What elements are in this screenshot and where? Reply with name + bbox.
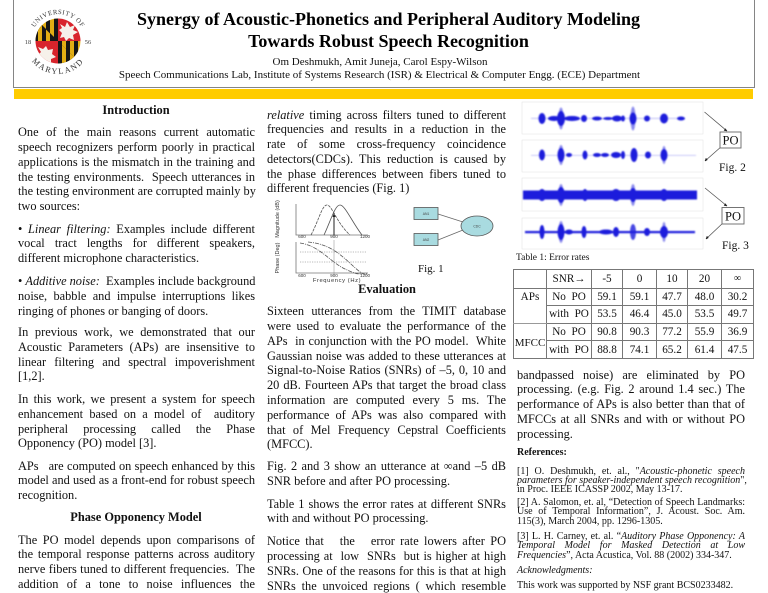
icon: University of Maryland seal <box>25 10 92 74</box>
text: results discussion: Notice that the error rate lowers after PO <box>267 534 506 548</box>
text: reference 3 <box>517 531 745 561</box>
affiliation: Speech Communications Lab, Institute of Systems Research (ISR) & Electrical & Computer Engg. (ECE) Department <box>119 69 640 81</box>
text: figure description <box>267 459 506 488</box>
table: error rates: 0 <box>637 273 642 285</box>
text: relative timing continuation: relative timing across filters tuned to different <box>267 108 506 122</box>
text: APs front-end: recognition. <box>18 488 77 502</box>
text: phase opponency model <box>18 533 255 591</box>
icon: University of Maryland seal: UNIVERSITY OF <box>31 10 84 26</box>
caption: Fig. 1: Fig. 1 <box>418 262 444 274</box>
icon: University of Maryland seal: MARYLAND <box>32 58 82 74</box>
text: evaluation paragraph: (MFCC). <box>267 437 313 451</box>
callout: PO arrows and labels: PO <box>723 134 738 148</box>
table: error rates: 53.5 <box>695 308 714 320</box>
text: this work: Opponency (PO) model [3]. <box>18 436 156 450</box>
text: previous work: In previous work, we demonstrated that our <box>18 325 255 339</box>
chart: waveforms Fig. 2 and Fig. 3 <box>522 102 704 250</box>
text: results discussion <box>267 534 506 593</box>
text: introduction paragraph: One of the main reasons current automatic <box>18 125 255 139</box>
text: results continuation: MFCCs at all SNRs and with or without PO <box>517 412 745 426</box>
chart: filter magnitude and phase response: 1200 <box>360 273 371 278</box>
yellow divider bar <box>14 89 753 99</box>
text: introduction paragraph: two sources: <box>18 199 80 213</box>
text: results discussion: processing at low SNRs but is higher at high <box>267 549 506 563</box>
text: evaluation paragraph: Sixteen utterances from the TIMIT database <box>267 304 506 318</box>
quarter: Crossland bottom left <box>35 41 58 64</box>
text: previous work: [1,2]. <box>18 369 45 383</box>
chart: filter magnitude and phase response: 600 <box>298 273 306 278</box>
text: reference 3: Frequencies”, Acta Acustica, Vol. 88 (2002) 334-347. <box>517 550 732 561</box>
text: reference 2 <box>517 497 745 527</box>
text: evaluation paragraph: information are computed every 5 ms. The <box>267 393 506 407</box>
text: figure description: SNR before and after PO processing. <box>267 474 450 488</box>
text: linear filtering <box>18 222 255 265</box>
text: results discussion: SNRs the unvoiced regions ( which resemble <box>267 579 506 593</box>
chart: filter magnitude and phase response: Phase (Deg) <box>275 242 281 273</box>
quarter: Calvert top left <box>35 18 58 41</box>
caption: Table 1: Table 1: Error rates <box>516 253 589 263</box>
text: evaluation paragraph: performance of APs was also compared with <box>267 408 506 422</box>
text: additive noise <box>18 274 256 318</box>
callout: PO arrows and labels: PO <box>725 210 741 224</box>
text: evaluation paragraph: were used to evaluate the performance of the <box>267 319 506 333</box>
table: error rates: 10 <box>666 273 678 285</box>
table: error rates: 74.1 <box>630 344 649 356</box>
text: evaluation paragraph: Signal-to-Noise Ratios (SNRs) of –5, 0, 10 and <box>267 363 506 377</box>
text: reference 2: Use of Temporal Information”, J. Acoust. Soc. Am. <box>517 506 745 517</box>
text: relative timing continuation <box>267 108 506 195</box>
table: error rates: MFCC <box>515 337 545 349</box>
wave 1: clean before PO <box>531 106 685 130</box>
table: error rates: 47.5 <box>728 344 747 356</box>
text: phase opponency model: nerve fibers tuned to different frequencies. The <box>18 562 255 576</box>
table: error rates: 48.0 <box>695 290 714 302</box>
text: previous work <box>18 325 255 383</box>
text: linear filtering: • Linear filtering: Examples include different <box>18 222 255 236</box>
text: APs front-end: APs are computed on speech enhanced by this <box>18 459 255 473</box>
heading: Phase Opponency Model: Phase Opponency Model <box>70 510 202 524</box>
chart: filter magnitude and phase response: Frequency (Hz) <box>313 278 361 284</box>
text: results continuation: bandpassed noise) are eliminated by PO <box>517 368 745 382</box>
diagram: AN fibers to coincidence detector <box>414 207 494 246</box>
text: linear filtering: vocal tract lengths for different speakers, <box>18 236 255 250</box>
table: error rates: 90.3 <box>630 326 649 338</box>
heading: Introduction: Introduction <box>102 102 170 116</box>
caption: Fig. 2: Fig. 2 <box>719 162 746 174</box>
icon: University of Maryland seal: 18 <box>25 39 31 46</box>
text: APs front-end: model and used as a front-end for robust speech <box>18 473 255 487</box>
text: table description: with and without PO processing. <box>267 511 428 525</box>
text: introduction paragraph <box>18 125 256 213</box>
table: error rates: 61.4 <box>695 344 714 356</box>
caption: Fig. 3: Fig. 3 <box>722 240 749 252</box>
quarter: Crossland top right <box>58 18 81 41</box>
text: table description <box>267 497 506 525</box>
wave 4: noisy after PO <box>525 221 695 243</box>
text: evaluation paragraph: APs in conjunction with the PO model. White <box>267 334 506 348</box>
text: this work: In this work, we present a system for speech <box>18 392 255 406</box>
title: Synergy of Acoustic-Phonetics and Peripheral Auditory Modeling <box>137 9 640 29</box>
table: error rates <box>513 269 754 359</box>
text: reference 1 <box>516 466 747 495</box>
text: reference 2: [2] A. Salomon, et. al, “Detection of Speech Landmarks: <box>517 497 745 508</box>
table: error rates: -5 <box>602 273 612 285</box>
table: error rates: 90.8 <box>597 326 617 338</box>
diagram: AN fibers to coincidence detector: CDC <box>473 224 481 228</box>
text: evaluation paragraph: Gaussian noise was added to these utterances at <box>267 349 506 363</box>
chart: filter magnitude and phase response: 900 <box>330 273 338 278</box>
text: relative timing continuation: frequencies and results in a reduction in the <box>267 122 506 136</box>
text: reference 1: in Proc. IEEE ICASSP 2002, May 13-17. <box>517 484 682 495</box>
table: error rates: 65.2 <box>662 344 682 356</box>
text: figure description: Fig. 2 and 3 show an utterance at ∞and –5 dB <box>267 459 506 473</box>
heading: Acknowledgments: Acknowledgments: <box>517 564 593 576</box>
text: reference 2: 115(3), March 2004, pp. 1296-1305. <box>517 516 663 527</box>
heading: References: References: <box>517 447 567 458</box>
chart: filter magnitude and phase response: 600 <box>298 234 306 239</box>
table: error rates: with PO <box>549 344 589 356</box>
text: phase opponency model: The PO model depends upon comparisons of <box>18 533 255 547</box>
text: linear filtering: different microphone characteristics. <box>18 251 199 265</box>
heading: Evaluation: Evaluation <box>358 282 416 296</box>
text: reference 1: parameters for speaker-independent speech recognition", <box>517 475 747 486</box>
table: error rates: APs <box>521 290 539 302</box>
text: results discussion: SNRs. One of the reasons for this is that at high <box>267 564 506 578</box>
text: this work: peripheral processing called the Phase <box>18 422 255 436</box>
authors: Om Deshmukh, Amit Juneja, Carol Espy-Wilson <box>273 56 487 68</box>
text: previous work: Acoustic Parameters (APs) are insensitive to <box>18 340 255 354</box>
text: relative timing continuation: rate of some cross-frequency coincidence <box>267 137 506 151</box>
table: error rates: 20 <box>699 273 710 285</box>
chart: filter magnitude and phase response <box>275 200 371 284</box>
table: error rates: 36.9 <box>728 326 747 338</box>
quarter: Calvert bottom right <box>58 41 81 64</box>
table: error rates: 53.5 <box>597 308 617 320</box>
table: error rates: 45.0 <box>662 308 682 320</box>
table: error rates: 55.9 <box>695 326 714 338</box>
text: results continuation: performance of APs is also better than that of <box>517 397 745 411</box>
table: error rates: 46.4 <box>630 308 649 320</box>
text: reference 3: [3] L. H. Carney, et. al. “Auditory Phase Opponency: A <box>517 531 745 542</box>
table: error rates: 59.1 <box>630 290 649 302</box>
chart: filter magnitude and phase response: 1200 <box>360 234 371 239</box>
text: introduction paragraph: speech recognizers perform poorly in practical <box>18 140 255 154</box>
text: introduction paragraph: applications is the mismatch in the training and <box>18 155 255 169</box>
table: error rates: 59.1 <box>597 290 617 302</box>
table: error rates: 88.8 <box>597 344 617 356</box>
text: table description: Table 1 shows the error rates at different SNRs <box>267 497 506 511</box>
wave 2: clean after PO <box>531 145 696 165</box>
text: evaluation paragraph: 20 dB. Fourteen APs that target the broad class <box>267 378 506 392</box>
text: introduction paragraph: the testing environments. Speech utterances in <box>18 170 255 184</box>
text: results continuation: processing. <box>517 427 573 441</box>
text: additive noise: ringing of phones or banging of doors. <box>18 304 208 318</box>
text: introduction paragraph: the testing environment are corrupted mainly by <box>18 184 256 198</box>
table: error rates: 77.2 <box>662 326 682 338</box>
text: evaluation paragraph: that of Mel Frequency Cepstral Coefficients <box>267 423 506 437</box>
text: reference 3: Temporal Model for Masked Detection at Low <box>517 540 745 551</box>
table: error rates: No PO <box>552 290 586 302</box>
text: relative timing continuation: detectors(CDCs). This reduction is caused by <box>267 152 506 166</box>
diagram: AN fibers to coincidence detector: AN1 <box>423 212 429 216</box>
chart: filter magnitude and phase response: Magnitude (dB) <box>275 200 281 238</box>
title <box>137 9 640 51</box>
table: error rates: 47.7 <box>662 290 682 302</box>
text: phase opponency model: addition of a tone to noise influences the <box>18 577 255 591</box>
text: phase opponency model: the temporal response patterns across auditory <box>18 547 255 561</box>
text: relative timing continuation: the phase differences between fibers tuned to <box>267 167 506 181</box>
text: evaluation paragraph <box>267 304 506 451</box>
icon: University of Maryland seal: 56 <box>85 39 92 46</box>
diagram: AN fibers to coincidence detector: AN2 <box>423 238 429 242</box>
text: reference 1: [1] O. Deshmukh, et. al., "Acoustic-phonetic speech <box>517 466 745 476</box>
table: error rates: No PO <box>552 326 586 338</box>
title: Towards Robust Speech Recognition <box>248 31 529 51</box>
text: results continuation: processing. (e.g. Fig. 2 around 1.4 sec.) The <box>517 382 745 396</box>
text: additive noise: noise, babble and impulse interruptions likes <box>18 289 255 303</box>
table: error rates: 49.7 <box>728 308 747 320</box>
callout: PO arrows and labels <box>704 112 744 240</box>
text: previous work: linear filtering and spectral impoverishment <box>18 355 255 369</box>
text: APs front-end <box>18 459 255 502</box>
text: this work: enhancement based on a model of auditory <box>18 407 255 421</box>
table: error rates: with PO <box>549 308 589 320</box>
text: relative timing continuation: different frequencies (Fig. 1) <box>267 181 409 195</box>
table: error rates: ∞ <box>734 273 741 284</box>
header banner <box>13 0 755 88</box>
wave 3: noisy before PO <box>523 184 697 206</box>
text: this work <box>18 392 255 450</box>
text: additive noise: • Additive noise: Examples include background <box>18 274 255 288</box>
text: acknowledgments: This work was supported by NSF grant BCS0233482. <box>517 580 733 590</box>
chart: filter magnitude and phase response: 900 <box>330 234 338 239</box>
text: results continuation <box>517 368 745 441</box>
table: error rates: 30.2 <box>728 290 747 302</box>
table: error rates: SNR→ <box>553 273 585 285</box>
